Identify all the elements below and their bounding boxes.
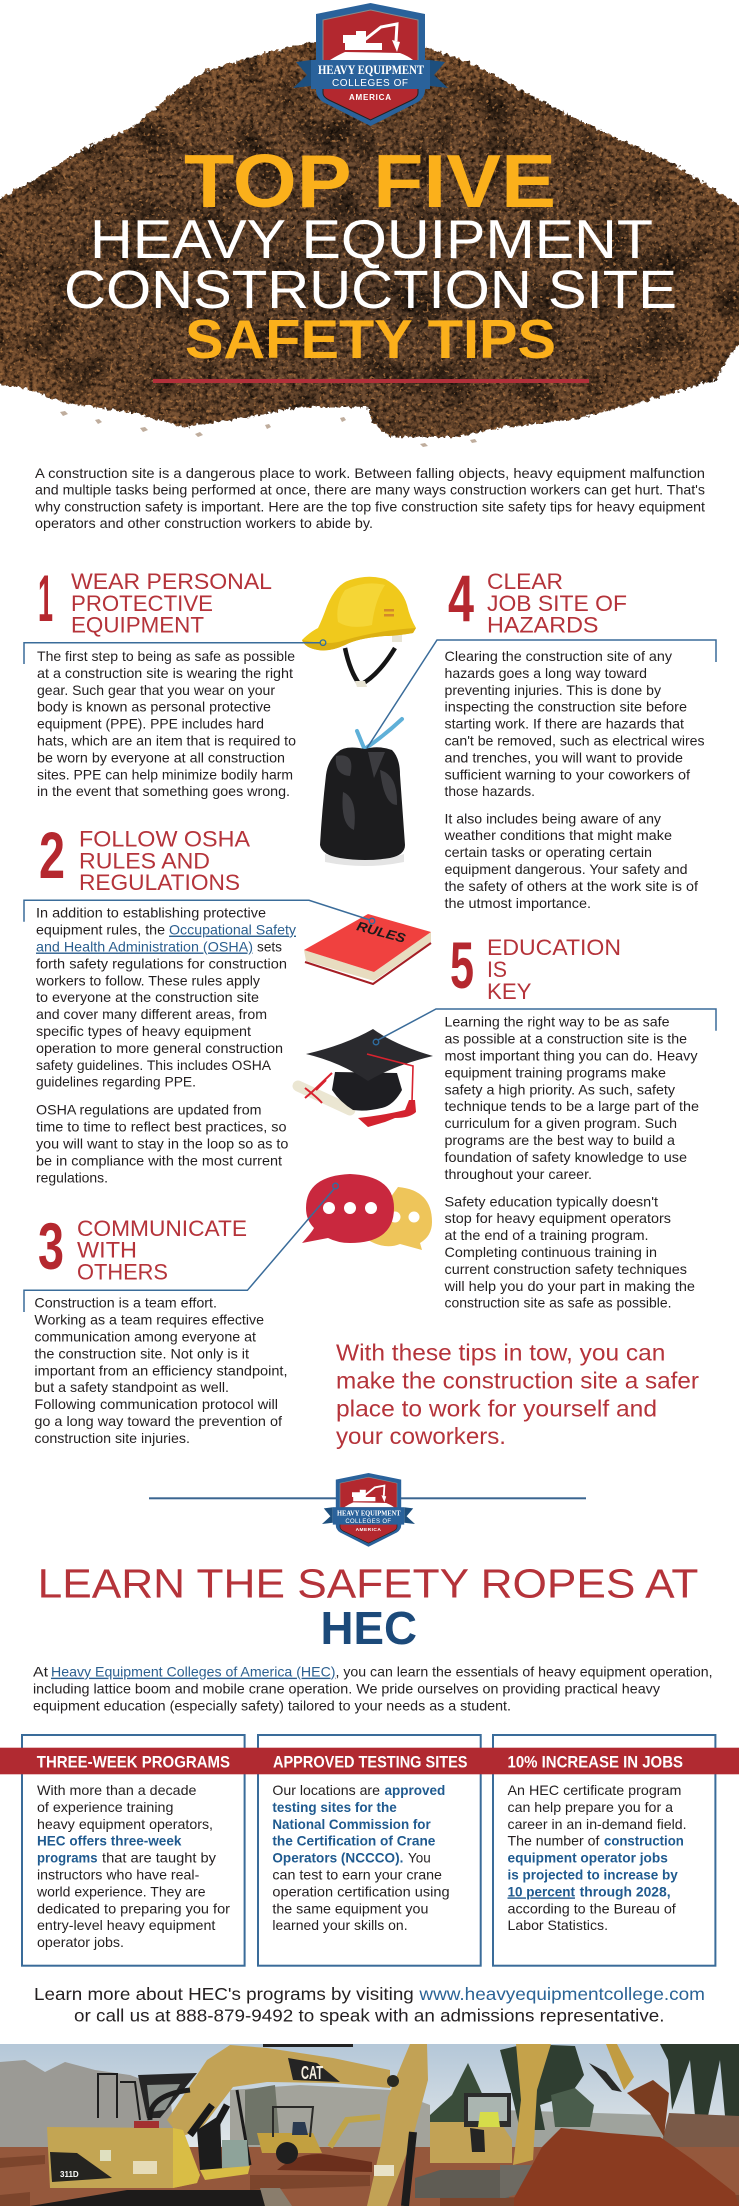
tip 2 body: guidelines regarding PPE. xyxy=(36,1074,196,1090)
tip 4 body: and trenches, you will want to provide xyxy=(444,749,683,765)
box: increase in jobs: equipment operator jobs xyxy=(508,1850,668,1866)
box: increase in jobs: through 2028, xyxy=(580,1883,671,1899)
box: three-week programs: instructors who have real- xyxy=(37,1866,200,1882)
intro paragraph: operators and other construction workers to abide by. xyxy=(35,515,373,531)
tip 2 body: OSHA regulations are updated from xyxy=(36,1102,262,1118)
logo: Heavy Equipment Colleges of America: AMERICA xyxy=(349,93,391,102)
title: TOP FIVE xyxy=(184,139,556,223)
box: increase in jobs: The number of xyxy=(508,1833,599,1849)
tip 4 connector xyxy=(367,640,716,748)
tip 5 body: stop for heavy equipment operators xyxy=(444,1210,671,1226)
box: increase in jobs: An HEC certificate program xyxy=(508,1782,681,1798)
tip 2 body: sets xyxy=(257,938,282,954)
tip 4 body: can't be removed, such as electrical wires xyxy=(444,732,704,748)
box: increase in jobs: according to the Bureau of xyxy=(508,1900,676,1916)
tip 2 body: regulations. xyxy=(36,1169,108,1185)
box: increase in jobs: 10 percent xyxy=(508,1883,575,1899)
tip 4 body: preventing injuries. This is done by xyxy=(444,682,661,698)
box: approved testing sites: You xyxy=(408,1850,431,1866)
tip 3 body: but a safety standpoint as well. xyxy=(34,1379,229,1395)
tip 1 connector xyxy=(24,640,326,664)
call to action xyxy=(34,1984,705,2026)
tip 2 body: operation to more general construction xyxy=(36,1040,283,1056)
tip 2 body: In addition to establishing protective xyxy=(36,905,266,921)
tip 1 body: The first step to being as safe as possible xyxy=(37,648,295,664)
photo: excavators on a dirt site xyxy=(0,2044,739,2209)
box: three-week programs: dedicated to preparing you for xyxy=(37,1900,230,1916)
tip 2 heading: FOLLOW OSHA xyxy=(79,827,250,852)
tip 3 body: go a long way toward the prevention of xyxy=(34,1413,282,1429)
tip 1 body: equipment (PPE). PPE includes hard xyxy=(37,716,264,732)
tip 2 body: workers to follow. These rules apply xyxy=(35,972,260,988)
intro paragraph: A construction site is a dangerous place to work. Between falling objects, heavy equipment malfunction xyxy=(35,465,705,481)
tip 3 body: Construction is a team effort. xyxy=(34,1295,217,1311)
tip 2 body: and Health Administration (OSHA) xyxy=(36,938,253,954)
box: increase in jobs: career in an in-demand field. xyxy=(508,1816,687,1832)
tip 5 body: Learning the right way to be as safe xyxy=(444,1014,670,1030)
tip 3 heading: COMMUNICATE xyxy=(77,1216,247,1241)
box: three-week programs: programs xyxy=(37,1850,98,1866)
call to action: www.heavyequipmentcollege.com xyxy=(418,1984,705,2004)
closing statement: your coworkers. xyxy=(336,1423,506,1449)
tip 3 body: Following communication protocol will xyxy=(34,1396,278,1412)
box: approved testing sites: the Certification of Crane xyxy=(272,1833,436,1849)
divider line xyxy=(149,1497,586,1499)
logo: small repeat: AMERICA xyxy=(356,1527,381,1533)
HEC paragraph: At xyxy=(33,1664,48,1680)
tip 1 heading: EQUIPMENT xyxy=(71,613,204,638)
box: approved testing sites: operation certification using xyxy=(272,1883,450,1899)
red band with box titles xyxy=(0,1748,739,1774)
tip 5 body: Completing continuous training in xyxy=(444,1244,657,1260)
box: approved testing sites: approved xyxy=(384,1782,445,1798)
box: increase in jobs: Labor Statistics. xyxy=(508,1917,608,1933)
tip 2 connector xyxy=(24,900,375,924)
tip 4 body: those hazards. xyxy=(444,783,535,799)
tip 1 heading: 1 xyxy=(38,561,53,635)
tip 5 body: curriculum for a given program. Such xyxy=(444,1115,677,1131)
HEC paragraph: including lattice boom and mobile crane operation. We pride ourselves on providing practical heavy xyxy=(33,1681,660,1697)
tip 5 body: throughout your career. xyxy=(444,1166,592,1182)
tip 2 body: you will want to stay in the loop so as to xyxy=(36,1136,289,1152)
tip 5 body: current construction safety techniques xyxy=(444,1261,687,1277)
tip 3 heading: WITH xyxy=(77,1238,137,1263)
heading: learn the safety ropes: LEARN THE SAFETY ROPES AT xyxy=(38,1561,698,1607)
red band with box titles: THREE-WEEK PROGRAMS xyxy=(37,1754,230,1772)
HEC paragraph: equipment education (especially safety) tailored to your needs as a student. xyxy=(33,1698,511,1714)
tip 1 body: in the event that something goes wrong. xyxy=(37,783,290,799)
intro paragraph: and multiple tasks being performed at once, there are many ways construction workers can get hurt. That's xyxy=(35,482,705,498)
box: approved testing sites: National Commission for xyxy=(272,1816,431,1832)
box: approved testing sites: learned your skills on. xyxy=(272,1917,408,1933)
tip 2 body: be in compliance with the most current xyxy=(36,1152,282,1168)
tip 5 heading: EDUCATION xyxy=(487,935,621,960)
tip 3 heading: OTHERS xyxy=(77,1259,168,1284)
box frames xyxy=(22,1735,715,1966)
tip 5 heading: 5 xyxy=(450,928,474,1002)
box: approved testing sites: testing sites for the xyxy=(272,1799,397,1815)
tip 4 body xyxy=(443,648,704,911)
tip 4 body: starting work. If there are hazards that xyxy=(444,716,684,732)
closing statement: place to work for yourself and xyxy=(336,1395,657,1421)
box: approved testing sites: the same equipment you xyxy=(272,1900,428,1916)
header: soil pile xyxy=(0,42,739,447)
tip 1 body xyxy=(37,648,296,799)
tip 1 body: be worn by everyone at all construction xyxy=(37,749,285,765)
icon: yellow hard hat xyxy=(302,577,416,687)
call to action: Learn more about HEC's programs by visiting xyxy=(34,1984,414,2004)
tip 2 heading xyxy=(39,818,250,895)
box: three-week programs: operator jobs. xyxy=(37,1934,124,1950)
tip 5 body: programs are the best way to build a xyxy=(444,1132,675,1148)
tip 3 connector xyxy=(24,1183,338,1312)
tip 5 body: will help you do your part in making the xyxy=(443,1278,695,1294)
tip 5 body: at the end of a training program. xyxy=(444,1227,648,1243)
tip 3 heading: 3 xyxy=(38,1209,64,1283)
closing statement: make the construction site a safer xyxy=(336,1367,699,1393)
tip 1 body: at a construction site is wearing the right xyxy=(37,665,293,681)
tip 4 body: sufficient warning to your coworkers of xyxy=(444,766,690,782)
HEC paragraph xyxy=(33,1664,712,1714)
photo: excavators on a dirt site: CAT xyxy=(301,2063,323,2083)
tip 5 connector xyxy=(373,1009,716,1045)
tip 1 heading: WEAR PERSONAL xyxy=(71,569,272,594)
tip 2 heading: 2 xyxy=(39,818,65,892)
tip 4 body: the utmost importance. xyxy=(444,895,591,911)
title: HEAVY EQUIPMENT xyxy=(90,208,653,270)
tip 5 body: as possible at a construction site is the xyxy=(444,1031,687,1047)
tip 2 heading: RULES AND xyxy=(79,848,210,873)
tip 1 body: sites. PPE can help minimize bodily harm xyxy=(37,766,293,782)
red band with box titles: APPROVED TESTING SITES xyxy=(273,1754,468,1772)
box: approved testing sites: can test to earn your crane xyxy=(272,1866,442,1882)
closing statement xyxy=(336,1340,699,1449)
icon: speech bubbles xyxy=(302,1174,432,1250)
tip 1 body: body is known as personal protective xyxy=(37,699,271,715)
box: three-week programs: HEC offers three-week xyxy=(37,1833,182,1849)
tip 5 body: construction site as safe as possible. xyxy=(444,1295,672,1311)
tip 2 body: equipment rules, the xyxy=(36,922,165,938)
tip 5 body: equipment training programs make xyxy=(444,1064,666,1080)
tip 1 body: hats, which are an item that is required to xyxy=(37,732,296,748)
tip 2 body: time to time to reflect best practices, so xyxy=(36,1119,287,1135)
intro paragraph xyxy=(34,465,705,531)
box: increase in jobs: can help prepare you for a xyxy=(508,1799,673,1815)
tip 3 heading xyxy=(38,1209,247,1284)
tip 4 body: equipment dangerous. Your safety and xyxy=(444,861,688,877)
tip 4 heading xyxy=(448,561,627,638)
HEC paragraph: , you can learn the essentials of heavy equipment operation, xyxy=(336,1664,712,1680)
tip 1 heading xyxy=(38,561,272,638)
tip 1 heading: PROTECTIVE xyxy=(71,591,213,616)
icon: black trash bag xyxy=(320,747,405,866)
tip 3 body: the construction site. Not only is it xyxy=(34,1345,249,1361)
tip 2 body xyxy=(35,905,296,1185)
closing statement: With these tips in tow, you can xyxy=(336,1340,665,1366)
title: CONSTRUCTION SITE xyxy=(64,260,677,320)
box: three-week programs: heavy equipment operators, xyxy=(37,1816,213,1832)
logo: small repeat: HEAVY EQUIPMENT xyxy=(337,1509,401,1518)
logo: Heavy Equipment Colleges of America: COLLEGES OF xyxy=(332,78,408,89)
box: increase in jobs xyxy=(508,1782,687,1933)
heading: learn the safety ropes: HEC xyxy=(320,1602,417,1654)
tip 5 body xyxy=(443,1014,699,1311)
icon: red rules book xyxy=(304,914,431,984)
heading: learn the safety ropes xyxy=(38,1561,698,1654)
tip 5 body: safety a high priority. As such, safety xyxy=(444,1081,675,1097)
tip 5 body: Safety education typically doesn't xyxy=(444,1193,658,1209)
box: three-week programs: With more than a decade xyxy=(37,1782,197,1798)
tip 4 body: inspecting the construction site before xyxy=(444,699,687,715)
box: three-week programs: that are taught by xyxy=(102,1850,216,1866)
title: SAFETY TIPS xyxy=(185,308,556,370)
box: three-week programs: entry-level heavy equipment xyxy=(37,1917,215,1933)
box: increase in jobs: construction xyxy=(604,1833,684,1849)
tip 4 body: the safety of others at the work site is of xyxy=(444,878,698,894)
tip 4 body: weather conditions that might make xyxy=(443,827,672,843)
box: increase in jobs: is projected to increase by xyxy=(508,1866,678,1882)
logo: Heavy Equipment Colleges of America: HEAVY EQUIPMENT xyxy=(318,62,424,77)
trash bag ties xyxy=(357,719,402,748)
tip 2 body: to everyone at the construction site xyxy=(36,989,259,1005)
tip 3 body: construction site injuries. xyxy=(34,1430,190,1446)
tip 1 body: gear. Such gear that you wear on your xyxy=(37,682,275,698)
box: approved testing sites: Operators (NCCCO). xyxy=(272,1850,403,1866)
logo: small repeat: COLLEGES OF xyxy=(345,1519,391,1525)
logo: Heavy Equipment Colleges of America xyxy=(293,3,448,126)
box: approved testing sites xyxy=(272,1782,450,1933)
tip 4 body: Clearing the construction site of any xyxy=(444,648,672,664)
tip 2 body: and cover many different areas, from xyxy=(36,1006,267,1022)
tip 5 body: foundation of safety knowledge to use xyxy=(444,1149,687,1165)
call to action: or call us at 888-879-9492 to speak with an admissions representative. xyxy=(74,2006,664,2026)
tip 4 heading: JOB SITE OF xyxy=(487,591,627,616)
photo: excavators on a dirt site: 311D xyxy=(60,2170,79,2179)
HEC paragraph: Heavy Equipment Colleges of America (HEC) xyxy=(51,1664,336,1680)
tip 5 heading: IS xyxy=(487,957,507,982)
tip 2 body: safety guidelines. This includes OSHA xyxy=(36,1057,272,1073)
tip 2 body: specific types of heavy equipment xyxy=(36,1023,251,1039)
icon: graduation cap and diploma xyxy=(298,1029,433,1127)
red band with box titles: 10% INCREASE IN JOBS xyxy=(508,1754,683,1772)
logo: small repeat xyxy=(322,1473,415,1547)
tip 4 heading: 4 xyxy=(448,561,474,635)
tip 3 body xyxy=(34,1295,288,1446)
tip 2 heading: REGULATIONS xyxy=(79,870,240,895)
icon: red rules book: RULES xyxy=(355,918,408,946)
tip 5 heading xyxy=(450,928,621,1004)
tip 3 body: important from an efficiency standpoint, xyxy=(34,1362,288,1378)
tip 4 body: certain tasks or operating certain xyxy=(444,844,652,860)
tip 2 body: Occupational Safety xyxy=(169,922,296,938)
intro paragraph: why construction safety is important. Here are the top five construction site safety tips for heavy equipment xyxy=(34,498,705,514)
tip 2 body: forth safety regulations for construction xyxy=(36,955,287,971)
box: approved testing sites: Our locations are xyxy=(272,1782,380,1798)
tip 5 body: technique tends to be a large part of the xyxy=(444,1098,699,1114)
tip 4 body: It also includes being aware of any xyxy=(444,810,661,826)
title xyxy=(64,139,677,383)
tip 4 body: hazards goes a long way toward xyxy=(444,665,647,681)
box: three-week programs xyxy=(36,1782,230,1950)
tip 5 body: most important thing you can do. Heavy xyxy=(444,1048,698,1064)
tip 5 heading: KEY xyxy=(487,979,532,1004)
tip 4 heading: HAZARDS xyxy=(487,613,598,638)
box: three-week programs: of experience training xyxy=(37,1799,173,1815)
tip 4 heading: CLEAR xyxy=(487,569,563,594)
tip 3 body: Working as a team requires effective xyxy=(34,1312,264,1328)
tip 3 body: communication among everyone at xyxy=(34,1328,256,1344)
box: three-week programs: world experience. They are xyxy=(36,1883,206,1899)
